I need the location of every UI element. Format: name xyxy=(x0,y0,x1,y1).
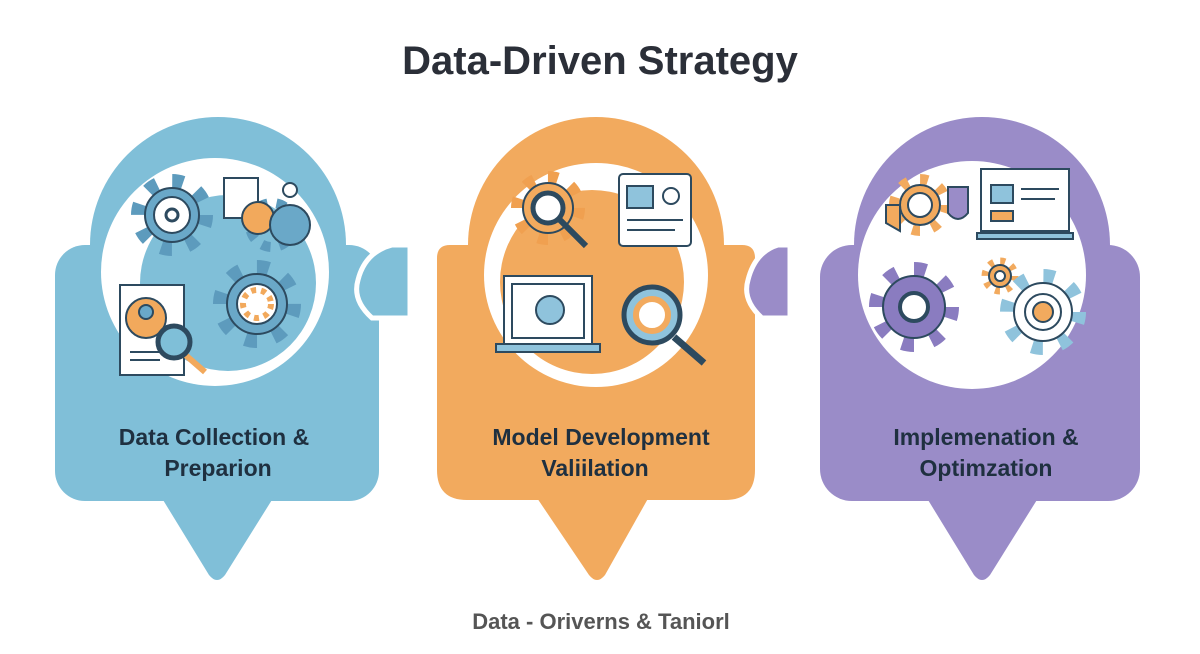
icon: target gear xyxy=(1007,276,1079,348)
icon: money gear xyxy=(886,179,968,231)
panel: model development: Valiilation xyxy=(541,455,649,481)
icon: video laptop xyxy=(496,276,600,352)
panel: data collection: Preparion xyxy=(164,455,272,481)
label: data collection: Data Collection & xyxy=(119,424,309,450)
label: implementation: Implemenation & xyxy=(893,424,1079,450)
icon: monitor xyxy=(977,169,1073,239)
panel: data collection xyxy=(55,117,410,580)
icon: clock person xyxy=(224,178,310,247)
label: model development: Model Development xyxy=(492,424,710,450)
connector: blue knob xyxy=(357,245,410,318)
connector: purple knob xyxy=(747,245,790,318)
panel: implementation: Optimzation xyxy=(920,455,1052,481)
icon: gear eye xyxy=(138,181,206,249)
icon: report xyxy=(619,174,691,246)
icon: big gear xyxy=(876,269,952,345)
icon: gear in gear xyxy=(220,267,294,341)
icon: gear magnifier xyxy=(517,177,586,246)
icon: small gear xyxy=(985,261,1015,291)
icon: magnifier xyxy=(624,287,704,363)
panel: implementation xyxy=(820,117,1140,580)
panel: model development xyxy=(437,117,790,580)
title: Data-Driven Strategy xyxy=(402,39,799,83)
icon: profile doc xyxy=(120,285,205,375)
footer: Data - Oriverns & Taniorl xyxy=(472,609,730,634)
